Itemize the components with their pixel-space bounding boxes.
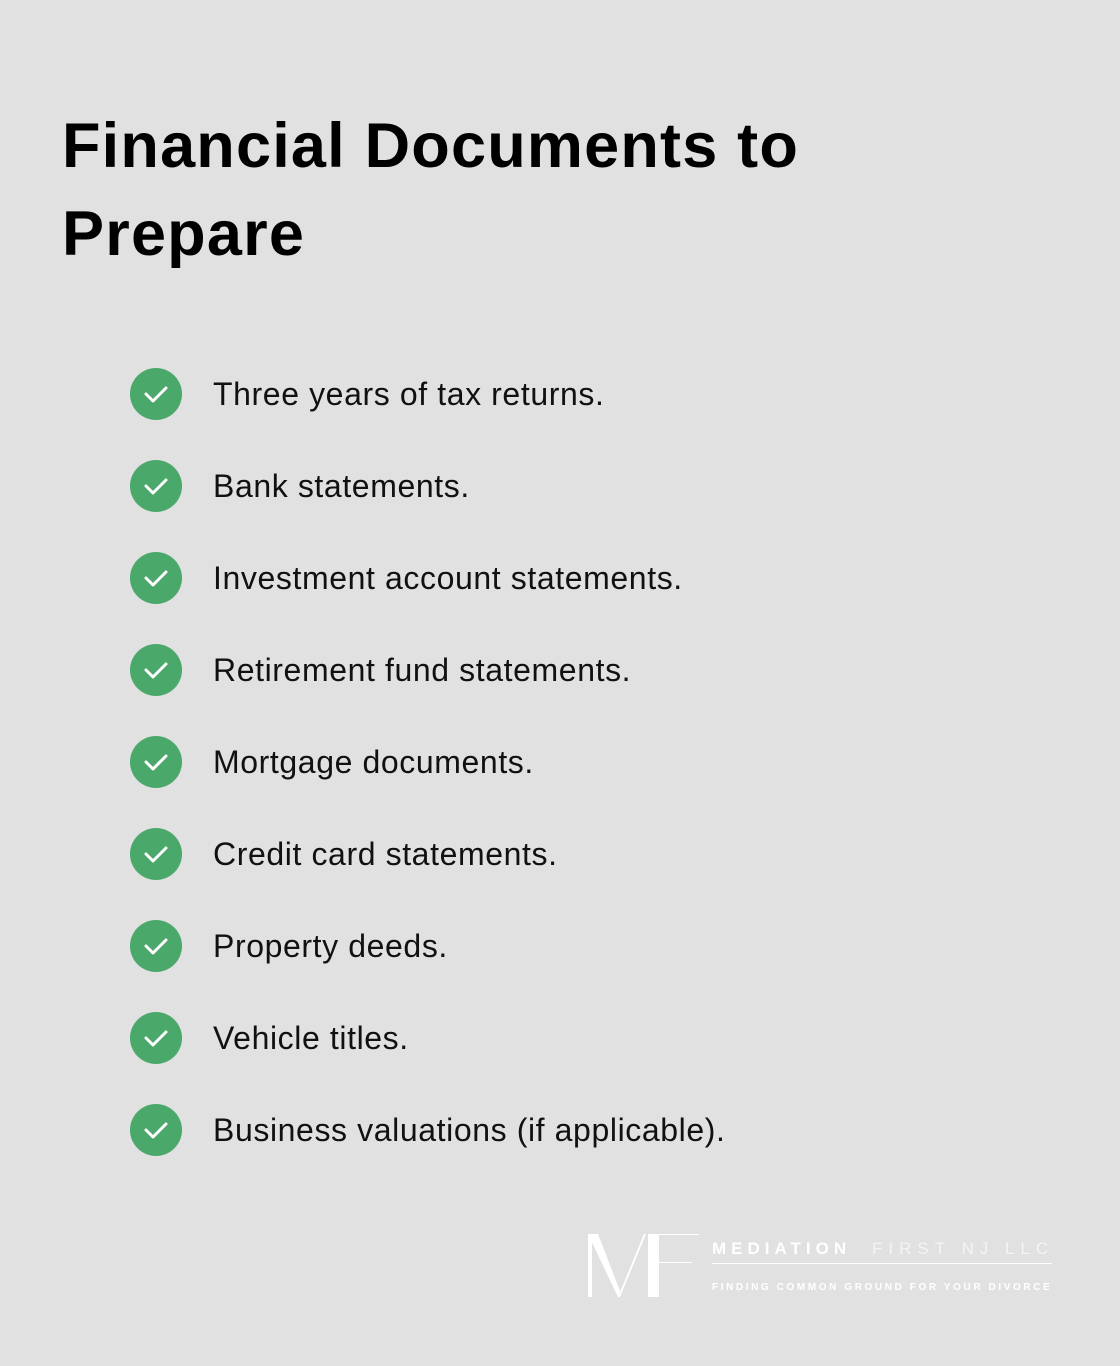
item 1 — [130, 368, 604, 420]
title: Financial Documents to — [62, 111, 799, 181]
item 7: Property deeds. — [213, 928, 448, 964]
item 2 — [130, 460, 470, 512]
item 6: Credit card statements. — [213, 836, 558, 872]
logo text: MEDIATION — [712, 1239, 851, 1258]
item 2: Bank statements. — [213, 468, 470, 504]
title: Prepare — [62, 199, 305, 269]
item 1: Three years of tax returns. — [213, 376, 604, 412]
logo — [588, 1234, 1054, 1297]
logo mark MF — [588, 1234, 699, 1297]
item 5 — [130, 736, 534, 788]
item 3 — [130, 552, 683, 604]
logo text: FIRST NJ LLC — [872, 1239, 1054, 1258]
item 6 — [130, 828, 558, 880]
item 4 — [130, 644, 631, 696]
item 5: Mortgage documents. — [213, 744, 534, 780]
item 4: Retirement fund statements. — [213, 652, 631, 688]
item 9 — [130, 1104, 726, 1156]
item 8 — [130, 1012, 409, 1064]
item 3: Investment account statements. — [213, 560, 683, 596]
logo text — [712, 1239, 1054, 1293]
checklist — [130, 368, 726, 1156]
title — [62, 111, 799, 269]
logo text: FINDING COMMON GROUND FOR YOUR DIVORCE — [712, 1282, 1052, 1293]
item 8: Vehicle titles. — [213, 1020, 409, 1056]
item 9: Business valuations (if applicable). — [213, 1112, 726, 1148]
item 7 — [130, 920, 448, 972]
